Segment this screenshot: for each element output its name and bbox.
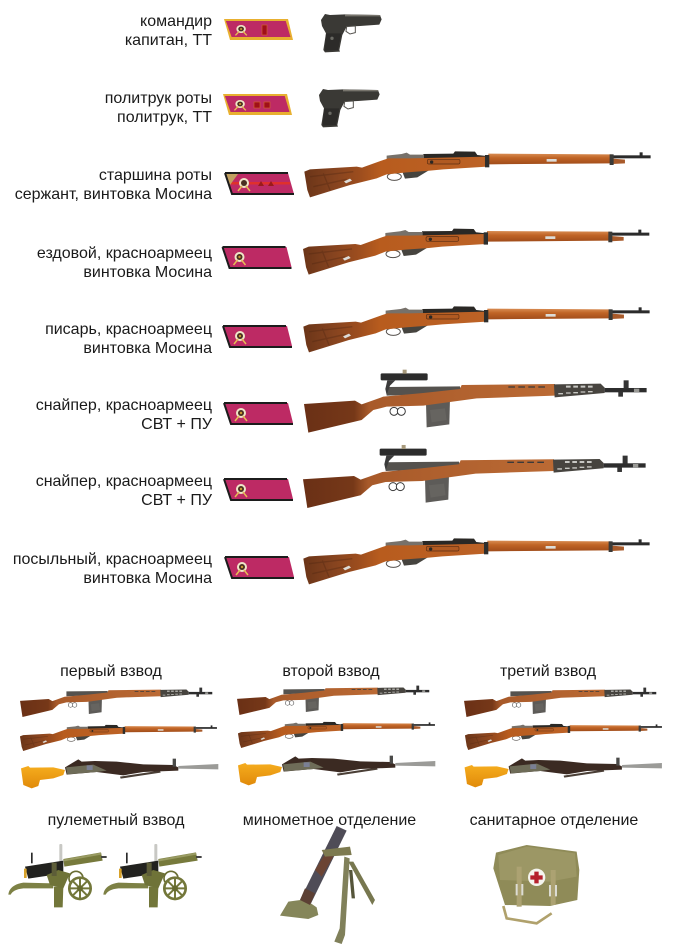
- panel: second platoon: [237, 663, 435, 785]
- icon: TT pistol: [319, 89, 380, 127]
- panel: third platoon: [464, 663, 662, 787]
- panel: first platoon: [20, 663, 218, 788]
- icon: Maxim machine gun: [103, 844, 202, 907]
- icon: SVT rifle: [237, 686, 429, 715]
- text: commander label: капитан, ТТ: [125, 32, 212, 49]
- text: company sergeant label: старшина роты: [99, 167, 212, 184]
- icon: DP machine gun: [465, 758, 662, 787]
- heading: medical section: санитарное отделение: [470, 812, 638, 829]
- text: messenger label: винтовка Мосина: [83, 570, 212, 587]
- heading: mortar section: минометное отделение: [243, 812, 416, 829]
- row: sniper two: [36, 445, 646, 509]
- icon: sergeant collar tab: [225, 173, 294, 194]
- row: clerk: [45, 306, 650, 357]
- text: political officer label: политрук роты: [105, 90, 212, 107]
- text: clerk label: винтовка Мосина: [83, 340, 212, 357]
- icon: SVT rifle with scope: [303, 445, 646, 508]
- icon: TT pistol: [321, 14, 382, 52]
- icon: medical bag: [493, 845, 579, 923]
- panel: medical section: [470, 812, 638, 923]
- row: political officer: [105, 89, 380, 127]
- text: sniper label: СВТ + ПУ: [141, 416, 213, 433]
- text: clerk label: писарь, красноармеец: [45, 321, 212, 338]
- heading: second platoon: второй взвод: [282, 663, 380, 680]
- heading: machine gun platoon: пулеметный взвод: [48, 812, 185, 829]
- row: company sergeant: [15, 151, 651, 203]
- icon: SVT rifle: [464, 688, 656, 717]
- icon: mortar: [280, 826, 375, 944]
- icon: political officer collar tab: [223, 94, 292, 115]
- text: sniper label: снайпер, красноармеец: [36, 473, 212, 490]
- text: messenger label: посыльный, красноармеец: [13, 551, 212, 568]
- icon: Mosin rifle: [303, 306, 650, 352]
- row: messenger: [13, 538, 650, 587]
- text: driver label: ездовой, красноармеец: [37, 245, 212, 262]
- text: sniper label: снайпер, красноармеец: [36, 397, 212, 414]
- text: company sergeant label: сержант, винтовка Мосина: [15, 186, 212, 203]
- icon: Mosin rifle: [303, 229, 649, 275]
- icon: Maxim machine gun: [8, 844, 107, 907]
- text: sniper label: СВТ + ПУ: [141, 492, 213, 509]
- icon: Mosin rifle: [238, 722, 435, 748]
- panel: mortar section: [243, 812, 416, 944]
- icon: private collar tab: [224, 479, 293, 500]
- icon: private collar tab: [223, 326, 292, 347]
- icon: DP machine gun: [238, 756, 435, 785]
- row: sniper one: [36, 370, 647, 433]
- icon: private collar tab: [225, 557, 294, 578]
- icon: SVT rifle: [20, 688, 212, 717]
- panel: machine gun platoon: [8, 812, 202, 907]
- row: commander: [125, 13, 382, 52]
- icon: Mosin rifle: [304, 151, 651, 197]
- icon: private collar tab: [222, 247, 292, 268]
- icon: DP machine gun: [21, 759, 218, 788]
- icon: captain collar tab: [224, 19, 293, 40]
- icon: Mosin rifle: [303, 538, 650, 584]
- text: driver label: винтовка Мосина: [83, 264, 212, 281]
- icon: Mosin rifle: [465, 724, 662, 750]
- heading: third platoon: третий взвод: [500, 663, 597, 680]
- icon: Mosin rifle: [20, 725, 217, 751]
- row: driver: [37, 229, 649, 281]
- text: commander label: командир: [140, 13, 212, 30]
- text: political officer label: политрук, ТТ: [117, 109, 212, 126]
- heading: first platoon: первый взвод: [60, 663, 163, 680]
- icon: SVT rifle with scope: [304, 370, 647, 433]
- icon: private collar tab: [224, 403, 293, 424]
